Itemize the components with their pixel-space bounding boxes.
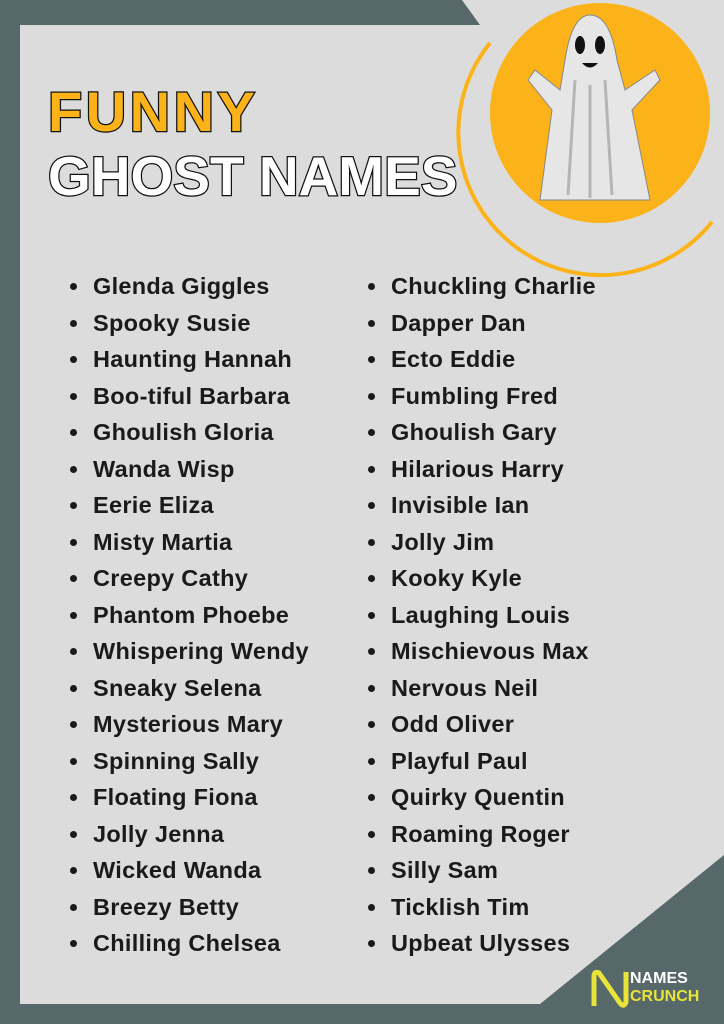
list column 1: Mysterious Mary [93, 711, 283, 737]
icon: orange circle with ghost [458, 3, 712, 275]
list column 2: Ticklish Tim [391, 894, 530, 920]
list column 2: Jolly Jim [391, 528, 494, 554]
list column 1: Wanda Wisp [93, 456, 235, 482]
list column 2: Nervous Neil [391, 674, 538, 700]
list column 2: Chuckling Charlie [391, 273, 596, 299]
list column 1: Jolly Jenna [93, 820, 224, 846]
list column 1: Spooky Susie [93, 310, 251, 336]
list column 1: Spinning Sally [93, 748, 259, 774]
list column 2: Hilarious Harry [391, 456, 564, 482]
list column 2: Quirky Quentin [391, 784, 565, 810]
logo: NAMES [630, 970, 688, 987]
list column 2: Roaming Roger [391, 820, 570, 846]
list column 1: Phantom Phoebe [93, 602, 289, 628]
list column 2: Fumbling Fred [391, 382, 558, 408]
list column 1: Eerie Eliza [93, 492, 214, 518]
list column 1: Floating Fiona [93, 784, 258, 810]
logo: CRUNCH [630, 988, 699, 1005]
list column 2: Ecto Eddie [391, 346, 515, 372]
list column 2: Silly Sam [391, 857, 498, 883]
list column 1: Whispering Wendy [93, 638, 309, 664]
list column 1: Chilling Chelsea [93, 930, 281, 956]
list column 2: Laughing Louis [391, 602, 570, 628]
list column 1: Boo-tiful Barbara [93, 382, 290, 408]
list column 1: Glenda Giggles [93, 273, 270, 299]
title: FUNNY [48, 80, 258, 143]
list column 2: Kooky Kyle [391, 565, 522, 591]
title: GHOST NAMES [48, 145, 457, 207]
list column 2: Playful Paul [391, 748, 528, 774]
list column 2: Ghoulish Gary [391, 419, 557, 445]
list column 2: Upbeat Ulysses [391, 930, 570, 956]
list column 1: Misty Martia [93, 528, 232, 554]
list column 1: Creepy Cathy [93, 565, 248, 591]
list column 2: Dapper Dan [391, 310, 526, 336]
list column 1: Ghoulish Gloria [93, 419, 274, 445]
list column 2: Mischievous Max [391, 638, 589, 664]
list column 1: Wicked Wanda [93, 857, 261, 883]
list column 2: Invisible Ian [391, 492, 529, 518]
list column 1 [70, 273, 309, 956]
list column 1: Sneaky Selena [93, 674, 262, 700]
logo [592, 970, 699, 1008]
title [48, 80, 457, 207]
list column 1: Breezy Betty [93, 894, 239, 920]
list column 2 [368, 273, 596, 956]
list column 2: Odd Oliver [391, 711, 514, 737]
list column 1: Haunting Hannah [93, 346, 292, 372]
